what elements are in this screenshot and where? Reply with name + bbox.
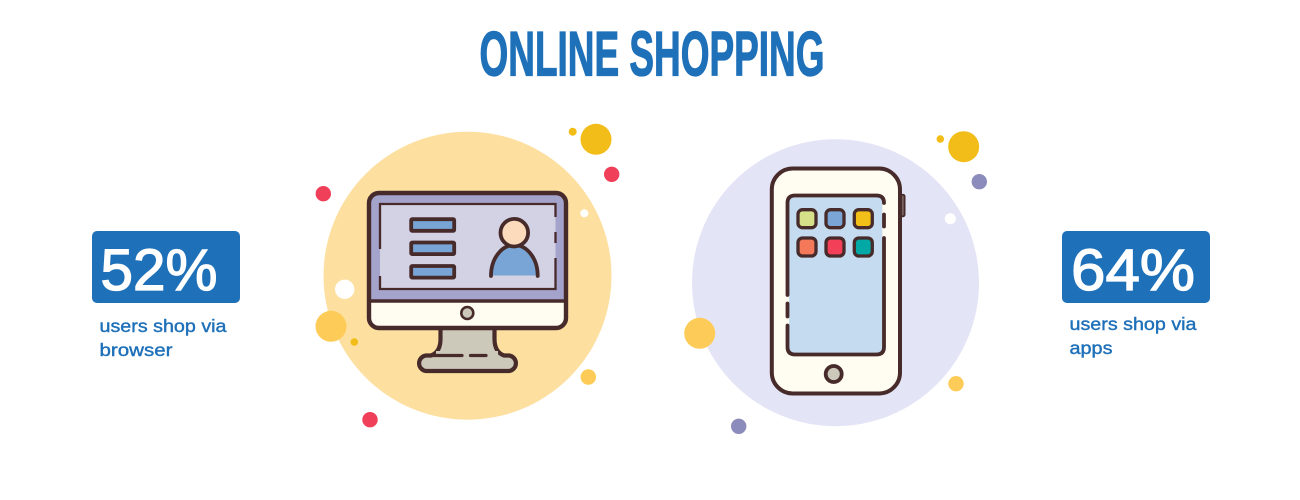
background circle bbox=[324, 132, 612, 420]
caption: users shop via browser bbox=[100, 316, 227, 360]
side button bbox=[900, 195, 905, 216]
panel: browser statistic bbox=[92, 231, 240, 360]
phone screen bbox=[788, 196, 884, 354]
title: ONLINE SHOPPING bbox=[480, 20, 824, 90]
person avatar bbox=[491, 219, 538, 276]
caption: users shop via apps: users shop via bbox=[1070, 314, 1197, 334]
caption: users shop via apps: apps bbox=[1070, 338, 1113, 358]
illustration: desktop monitor bbox=[316, 124, 619, 427]
panel: apps statistic bbox=[1062, 231, 1210, 358]
list rows bbox=[411, 219, 454, 278]
decorative dots bbox=[316, 124, 619, 427]
badge: 64%: 64% bbox=[1071, 238, 1195, 303]
illustration: smartphone bbox=[684, 131, 987, 434]
badge: 52%: 52% bbox=[100, 238, 218, 303]
monitor body bbox=[369, 193, 566, 328]
decorative dots bbox=[684, 131, 987, 434]
monitor screen bbox=[380, 204, 556, 289]
home button bbox=[826, 366, 842, 382]
caption: users shop via apps bbox=[1070, 314, 1197, 358]
app icons bbox=[798, 210, 872, 256]
monitor stand bbox=[418, 329, 517, 371]
caption: users shop via browser: browser bbox=[100, 340, 173, 360]
power button bbox=[461, 307, 473, 319]
caption: users shop via browser: users shop via bbox=[100, 316, 227, 336]
background circle bbox=[692, 139, 979, 426]
phone body bbox=[772, 168, 900, 394]
